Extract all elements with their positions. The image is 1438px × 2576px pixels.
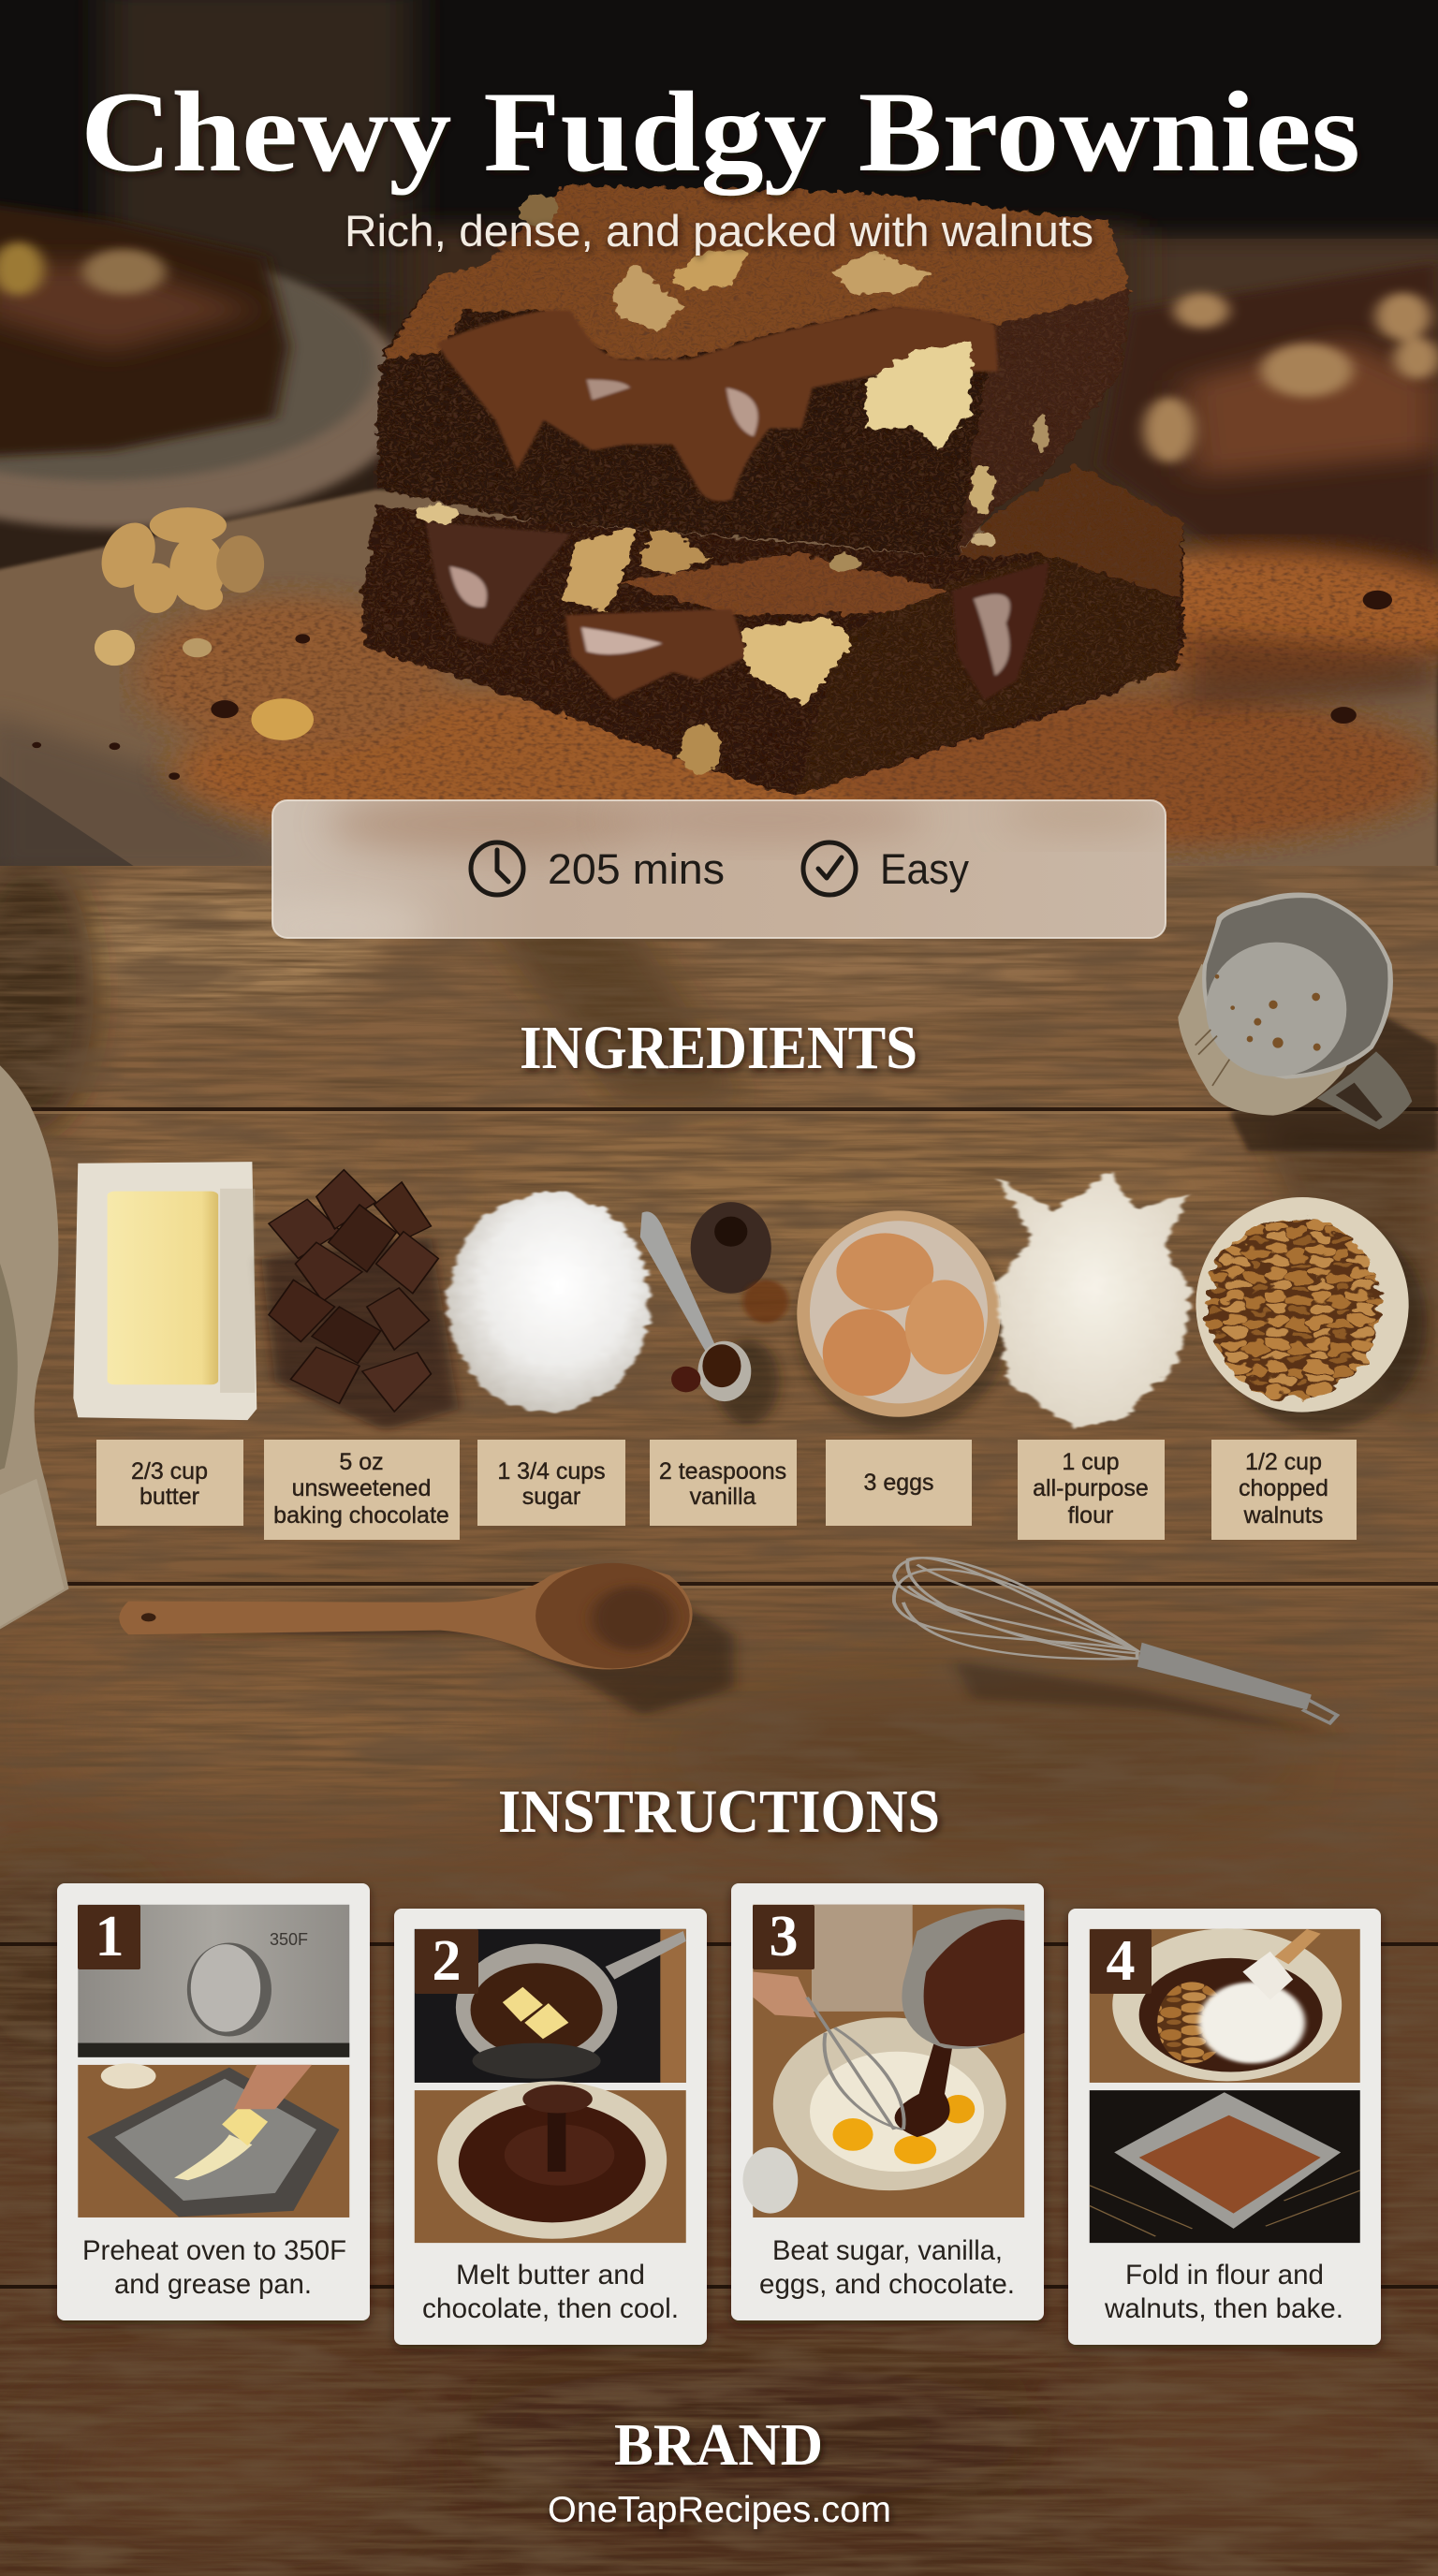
ingredient label: walnuts: walnuts: [1243, 1502, 1323, 1529]
step card 4: [1068, 1909, 1381, 2345]
heading: instructions: INSTRUCTIONS: [498, 1778, 940, 1846]
ingredient illustrations: [0, 1057, 1427, 1629]
step card 3: [731, 1883, 1044, 2320]
hero photo: stacked brownies: [0, 0, 1438, 878]
ingredient label: chocolate: 5 oz: [339, 1449, 384, 1475]
step 1 text: Preheat oven to 350F: [82, 2235, 346, 2266]
ingredient label: eggs: 3 eggs: [863, 1470, 934, 1496]
brand name: BRAND: [614, 2411, 823, 2478]
ingredient label: sugar: [477, 1440, 625, 1526]
step 4 number: 4: [1107, 1929, 1135, 1993]
subtitle: Rich, dense, and packed with walnuts: [345, 206, 1093, 256]
step 4 photos: [1090, 1928, 1360, 2243]
step card 1: [57, 1883, 370, 2320]
ingredient label: flour: all-purpose: [1033, 1475, 1149, 1501]
ingredient label: vanilla: 2 teaspoons: [659, 1458, 786, 1485]
icon: butter on paper: [73, 1162, 257, 1420]
step 1 number: 1: [95, 1905, 124, 1969]
step 3 number: 3: [770, 1905, 798, 1969]
ingredient label: chocolate: unsweetened: [292, 1475, 431, 1501]
step 2 badge: [415, 1929, 478, 1994]
wood table background: [0, 852, 1438, 2576]
step 1 text: and grease pan.: [114, 2269, 312, 2300]
difficulty: Easy: [880, 845, 969, 893]
ingredient label: walnuts: chopped: [1239, 1475, 1328, 1501]
ingredient label: chocolate: [264, 1440, 460, 1540]
icon: sugar pile: [448, 1193, 650, 1412]
step 2 text: chocolate, then cool.: [422, 2293, 679, 2324]
cook time: 205 mins: [548, 845, 725, 893]
ingredient label: walnuts: 1/2 cup: [1245, 1449, 1322, 1475]
step 3 text: Beat sugar, vanilla,: [772, 2235, 1003, 2266]
icon: vanilla spoon and bottle: [640, 1202, 788, 1425]
icon: linen cloth: [0, 1057, 68, 1629]
step 1 badge: [78, 1905, 140, 1969]
info bar: [271, 799, 1167, 939]
step 3 badge: [753, 1905, 814, 1969]
ingredient label: sugar: 1 3/4 cups: [497, 1458, 606, 1485]
icon: flour pile: [995, 1173, 1192, 1427]
ingredient label: butter: butter: [139, 1484, 199, 1510]
ingredient label: flour: 1 cup: [1062, 1449, 1120, 1475]
step 2 photos: [415, 1929, 686, 2243]
step 4 badge: [1090, 1929, 1152, 1994]
step 4 text: walnuts, then bake.: [1104, 2293, 1343, 2324]
icon: bowl of eggs: [797, 1210, 1009, 1430]
top brownie: [377, 184, 1130, 558]
step 4 text: Fold in flour and: [1125, 2260, 1324, 2291]
ingredient label: flour: [1018, 1440, 1165, 1540]
ingredient label: sugar: sugar: [522, 1484, 580, 1510]
step 2 number: 2: [433, 1929, 461, 1993]
icon: measuring cup: [1178, 892, 1438, 1151]
ingredient label: flour: flour: [1068, 1502, 1113, 1529]
icon: check: [803, 842, 856, 895]
ingredient label: vanilla: [650, 1440, 797, 1526]
ingredient label: butter: 2/3 cup: [131, 1458, 208, 1485]
ingredient label: vanilla: vanilla: [690, 1484, 756, 1510]
ingredient label: walnuts: [1211, 1440, 1357, 1540]
ingredient label: eggs: [826, 1440, 972, 1526]
icon: clock: [471, 842, 523, 895]
ingredient label: chocolate: baking chocolate: [273, 1502, 449, 1529]
step 3 text: eggs, and chocolate.: [759, 2269, 1015, 2300]
oven dial label: 350F: [270, 1930, 308, 1949]
website: OneTapRecipes.com: [548, 2490, 891, 2530]
step 2 text: Melt butter and: [456, 2260, 645, 2291]
icon: whisk: [894, 1558, 1348, 1736]
step 1 photos: [78, 1905, 349, 2217]
icon: wooden spoon: [119, 1563, 734, 1715]
heading: ingredients: INGREDIENTS: [520, 1014, 917, 1082]
icon: bowl of walnuts: [1196, 1197, 1427, 1430]
step 3 photo: [742, 1905, 1024, 2217]
ingredient label: butter: [96, 1440, 243, 1526]
step card 2: [394, 1909, 707, 2345]
icon: chocolate pieces: [261, 1170, 459, 1430]
title: Chewy Fudgy Brownies: [81, 67, 1360, 196]
bottom brownie: [361, 465, 1183, 796]
